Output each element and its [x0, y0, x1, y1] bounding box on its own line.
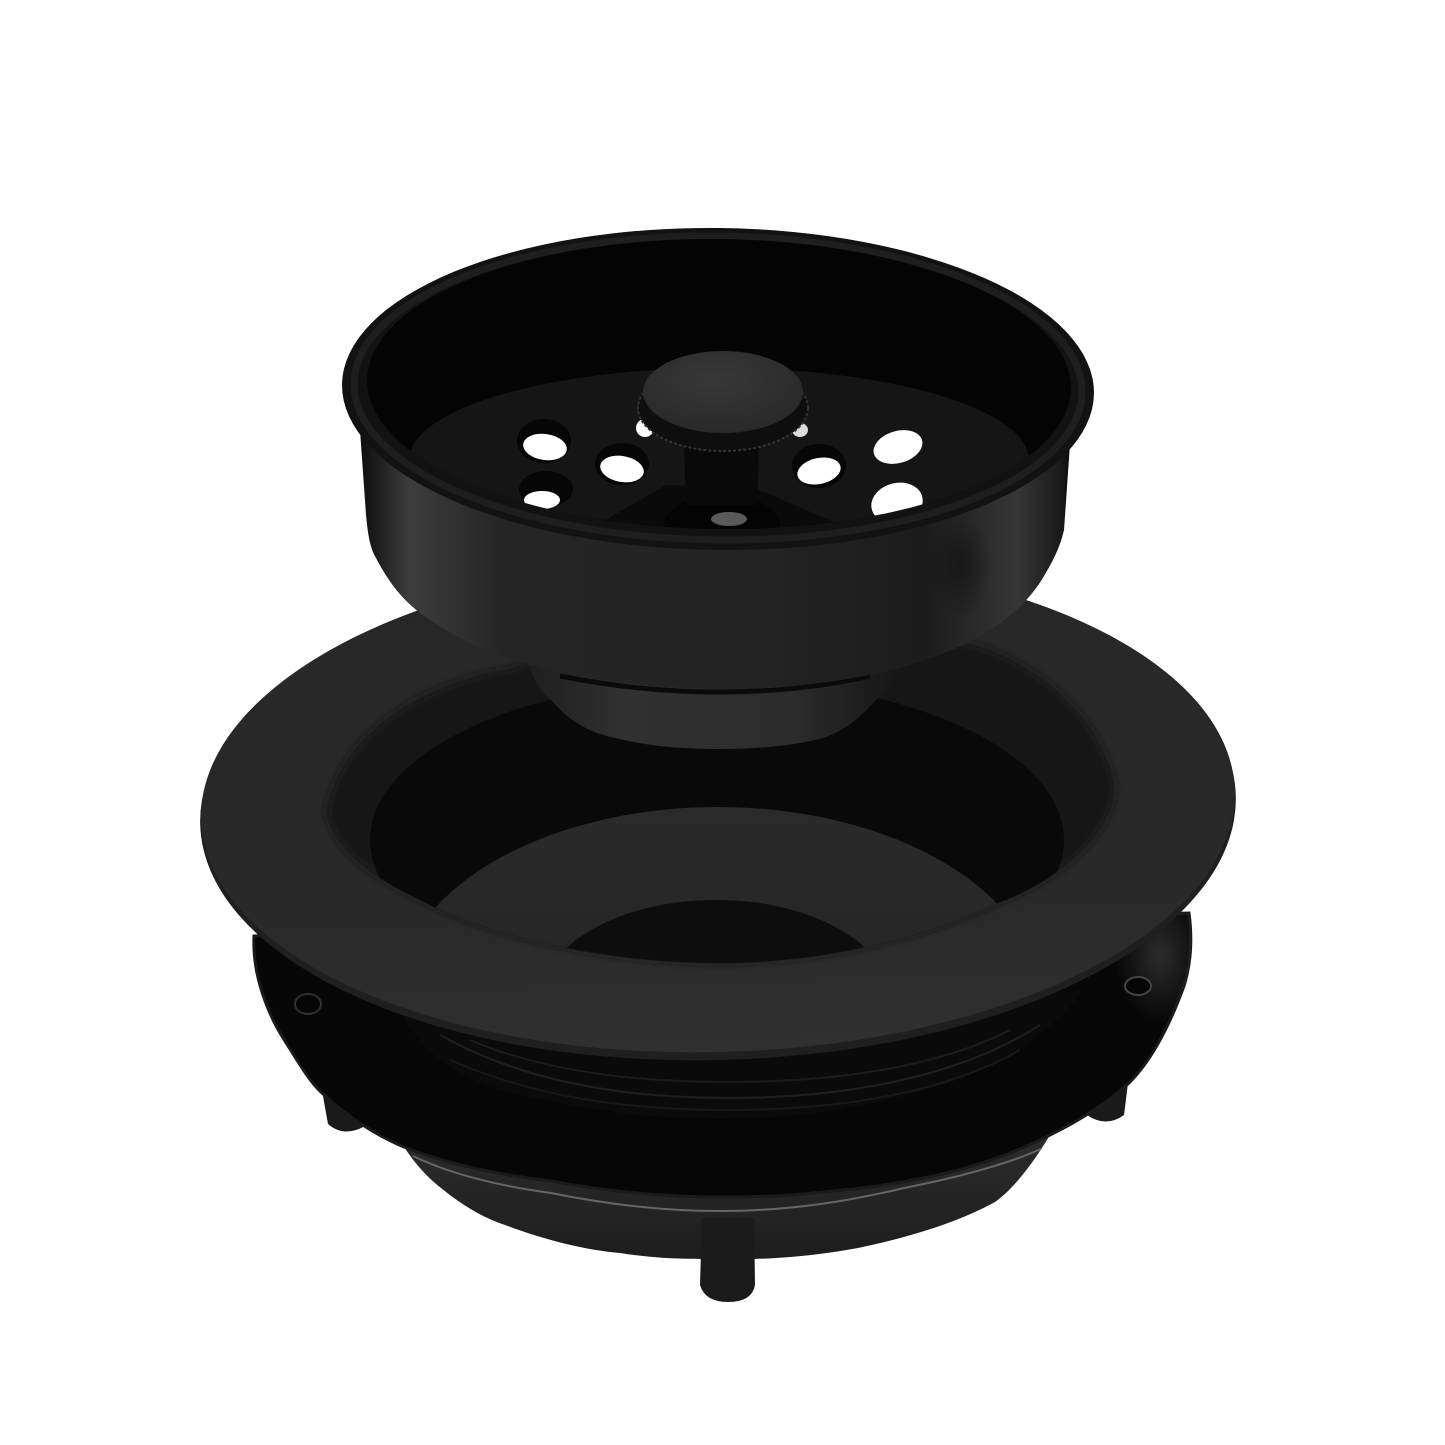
lower drain assembly: [254, 885, 1205, 1302]
product illustration: [200, 228, 1236, 1302]
gasket shadow: [560, 676, 870, 692]
icon: plate screw hole left: [295, 994, 321, 1014]
icon: right side leg: [1075, 1075, 1129, 1122]
basket cup body: [360, 430, 1071, 689]
icon: left side leg: [321, 1085, 380, 1132]
knob knurled skirt: [638, 365, 808, 451]
rim crest highlight: [352, 232, 1084, 544]
strainer basket: [340, 223, 1096, 749]
lower bowl: [404, 1135, 1050, 1259]
icon: centre leg: [700, 1218, 755, 1302]
flange recess shoulder: [326, 628, 1115, 963]
flange top surface: [194, 544, 1242, 1066]
bowl seam line: [413, 1149, 1041, 1211]
basket rim: [340, 223, 1096, 555]
knob stem: [684, 445, 759, 505]
drain opening: [567, 900, 864, 963]
threaded plate: [254, 913, 1191, 1197]
body shadow spot: [928, 510, 992, 620]
flange well: [370, 698, 1064, 963]
plate worn patch right: [1124, 914, 1190, 1010]
basket stem shroud: [528, 664, 899, 749]
sink flange: [200, 600, 1236, 1060]
threaded neck: [404, 991, 1083, 1119]
cone base: [606, 485, 834, 527]
icon: plate screw hole right: [1125, 977, 1151, 995]
basket interior: [365, 235, 1073, 533]
knob cap: [643, 351, 803, 433]
inner shelf: [436, 807, 996, 948]
strainer disc and holes: [411, 370, 1028, 526]
flange outer lip: [193, 546, 1243, 1074]
stem dome: [664, 495, 780, 555]
